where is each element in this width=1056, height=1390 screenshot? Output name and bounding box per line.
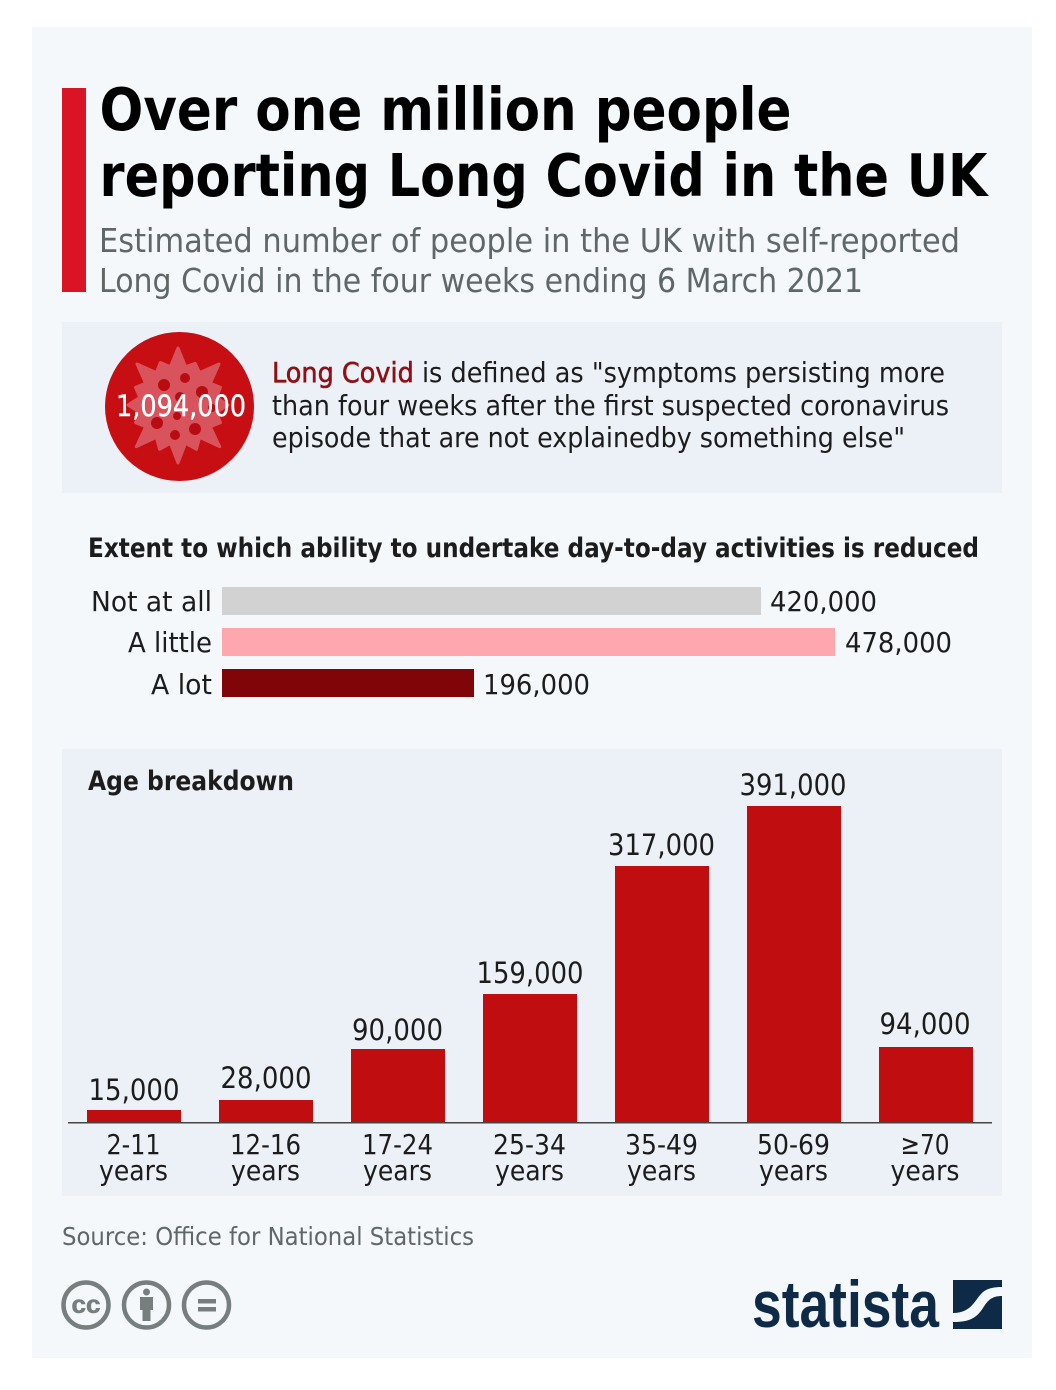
subtitle: Long Covid in the four weeks ending 6 March 2021 <box>99 261 863 300</box>
bar: 17-24 years <box>351 1013 445 1187</box>
row: a little: A little <box>128 626 212 659</box>
row: a little <box>128 626 952 659</box>
icon: cc: cc <box>72 1291 101 1319</box>
bar: 70 plus years: years <box>890 1154 960 1187</box>
bar: 2-11 years: years <box>99 1154 168 1187</box>
bar: 50-69 years <box>740 768 846 1187</box>
source: Source: Office for National Statistics <box>62 1222 474 1251</box>
definition text <box>272 356 949 454</box>
title accent bar <box>62 88 86 292</box>
definition text: Long Covid is defined as "symptoms persisting more <box>272 356 945 389</box>
bar: 17-24 years: 17-24 <box>362 1128 433 1161</box>
icon: virus badge with total: 1,094,000 <box>116 389 246 423</box>
row: not at all <box>91 585 877 618</box>
icon: attribution <box>124 1282 169 1328</box>
bar: 17-24 years: years <box>363 1154 432 1187</box>
bar: 35-49 years <box>608 828 715 1187</box>
title <box>100 75 989 210</box>
icon: creative commons licence <box>64 1282 229 1328</box>
icon: statista mark <box>953 1280 1002 1329</box>
bar: 12-16 years: 12-16 <box>230 1128 301 1161</box>
icon: no derivatives <box>184 1282 229 1328</box>
logo: statista: statista <box>752 1267 940 1341</box>
panel: age breakdown <box>62 749 1002 1196</box>
row: a lot: 196,000 <box>483 668 590 701</box>
bar: 25-34 years: 25-34 <box>493 1128 566 1161</box>
title: Over one million people <box>100 75 792 144</box>
bar: 12-16 years: 28,000 <box>220 1061 312 1095</box>
bar: 2-11 years <box>87 1073 181 1187</box>
bar: 50-69 years: years <box>759 1154 828 1187</box>
bar chart: extent of reduced activity <box>91 585 952 701</box>
heading: age breakdown: Age breakdown <box>88 766 294 797</box>
row: a lot <box>151 668 590 701</box>
bar: 25-34 years: 159,000 <box>476 956 584 990</box>
bar: 2-11 years: 15,000 <box>88 1073 180 1107</box>
row: not at all: 420,000 <box>770 585 877 618</box>
row: not at all: Not at all <box>91 585 212 618</box>
bar: 25-34 years: years <box>495 1154 564 1187</box>
row: a lot: A lot <box>151 668 212 701</box>
bar: 12-16 years <box>219 1061 313 1187</box>
definition text: than four weeks after the first suspected coronavirus <box>272 389 949 422</box>
subtitle <box>99 221 960 300</box>
subtitle: Estimated number of people in the UK with self-reported <box>99 221 960 260</box>
definition text: episode that are not explainedby something else" <box>272 421 905 454</box>
icon: virus badge with total <box>105 332 254 481</box>
bar: 70 plus years: 94,000 <box>880 1007 970 1041</box>
bar: 17-24 years: 90,000 <box>352 1013 443 1047</box>
bar: 2-11 years: 2-11 <box>106 1128 160 1161</box>
bar: 25-34 years <box>476 956 584 1187</box>
icon: cc <box>64 1282 108 1328</box>
bar: 35-49 years: 35-49 <box>625 1128 698 1161</box>
bar: 35-49 years: years <box>627 1154 696 1187</box>
bar: 12-16 years: years <box>231 1154 300 1187</box>
bar: 70 plus years: ≥70 <box>900 1128 950 1161</box>
bar: 35-49 years: 317,000 <box>608 828 715 862</box>
bar: 50-69 years: 50-69 <box>757 1128 830 1161</box>
panel: definition <box>62 322 1002 493</box>
row: a little: 478,000 <box>845 626 952 659</box>
bar: 50-69 years: 391,000 <box>740 768 846 802</box>
bar chart: age groups <box>87 768 973 1187</box>
bar: 70 plus years <box>879 1007 973 1187</box>
